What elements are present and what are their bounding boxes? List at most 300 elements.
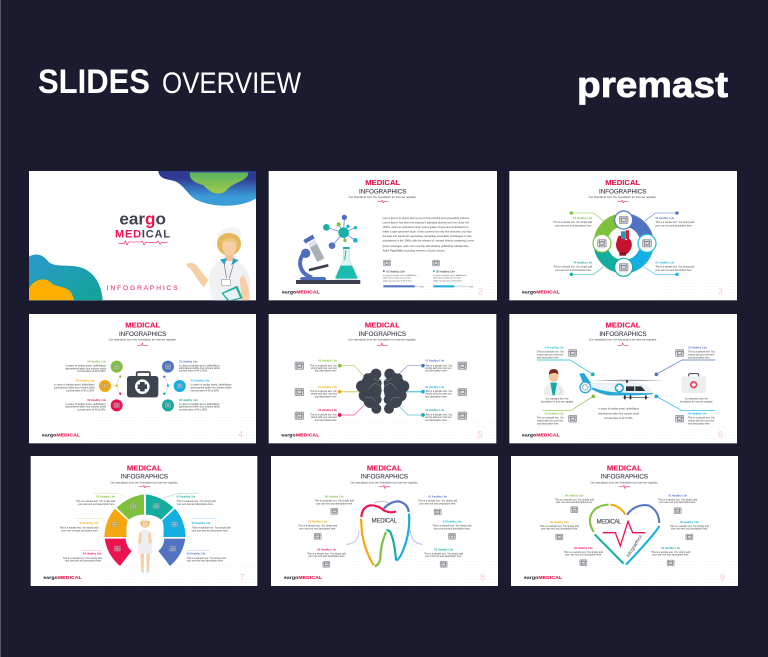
label: 06 healthy life: [310, 408, 338, 422]
heading: MEDICAL: [605, 178, 640, 187]
label: 02 healthy life: survival rates of 40 to 50%.: [191, 389, 220, 392]
label: 04 healthy life: [310, 385, 338, 398]
label: 01 healthy life: [177, 495, 216, 506]
heading: [589, 178, 657, 203]
label: 03 healthy life: administered within four minutes yields: [179, 406, 221, 409]
label: 02 healthy life: your own text and description here.: [434, 527, 471, 530]
stat: 01 healthy life: 90%: [420, 286, 424, 288]
connector dots: [591, 372, 658, 398]
label: 04 healthy life: This is a sample text. You simply add: [553, 266, 593, 269]
label: 06 healthy life: In cases of cardiac arrest, defibrillators: [65, 403, 107, 406]
label: 04 healthy life: [63, 551, 102, 563]
heading: [349, 178, 417, 203]
label: 04 healthy life: [537, 345, 565, 359]
label: 05 healthy life: your own text and description here.: [541, 528, 578, 531]
heading: [110, 463, 179, 488]
label: 01 healthy life: 01 Healthy Life: [177, 495, 196, 499]
label: 04 healthy life: 04 Healthy Life: [318, 385, 338, 389]
illustration: flask: [335, 247, 358, 279]
page number: 4: [238, 430, 243, 440]
label: 02 healthy life: This is a sample text. You simply add: [433, 525, 472, 528]
heading: INFOGRAPHICS: [601, 474, 648, 481]
heading: INFOGRAPHICS: [359, 331, 406, 338]
label: 05 healthy life: This is a sample text. You simply add: [540, 525, 579, 528]
label: 04 healthy life: This is a sample text. You simply add: [307, 552, 347, 555]
label: 02 healthy life: [191, 379, 232, 392]
text block: center: survival rates of 40 to 50%.: [604, 417, 633, 420]
heading: MEDICAL: [365, 321, 400, 330]
text block: paragraph: Lorem Ipsum has been the industry's standard dummy text ever since the: [383, 221, 469, 225]
page number: 3: [718, 287, 723, 297]
label: 01 healthy life: [418, 495, 458, 515]
label: 02 healthy life: 02 Healthy Life: [655, 261, 675, 265]
label: 04 healthy life: and description here.: [315, 395, 337, 398]
accent arcs: [346, 501, 423, 544]
heading: MEDICAL: [367, 463, 402, 472]
label: 03 healthy life: [424, 547, 464, 567]
label: 05 healthy life: 05 Healthy Life: [308, 520, 328, 524]
label: 01 healthy life: survival rates of 40 to 50%.: [179, 370, 208, 373]
label: 03 healthy life: 03 Healthy Life: [545, 412, 564, 416]
label: 01 healthy life: This is a sample text. You: [425, 364, 453, 367]
heading: INFOGRAPHICS: [119, 331, 166, 338]
label: 06 healthy life: [65, 398, 107, 412]
label: 06 healthy life: administered within four minutes yields: [65, 406, 107, 409]
label: 01 healthy life: 01 Healthy Life: [688, 345, 707, 349]
label: 06 healthy life: survival rates of 40 to 50%.: [77, 409, 106, 412]
label: 04 healthy life: simply add your own text: [537, 353, 563, 356]
illustration: heart: [616, 230, 632, 256]
heading: [350, 463, 419, 489]
label: 03 healthy life: [651, 546, 691, 566]
label: 03 healthy life: This is a sample text. You simply add: [424, 552, 464, 555]
connector lines: [537, 360, 715, 411]
stat: 02 healthy life: yields survival rates of 40 to 50%.: [433, 279, 463, 282]
page number: 7: [240, 572, 245, 582]
label: 01 healthy life: This is a sample text. You: [688, 351, 716, 354]
label: 02 healthy life: This is a sample text. You: [425, 390, 453, 393]
label: 03 healthy life: [179, 398, 221, 412]
label: 02 healthy life: your own text and description here.: [671, 528, 708, 531]
heading: Our standards form the foundation for how we regulate.: [590, 481, 659, 485]
illustration: heart outline: [590, 505, 659, 565]
illustration: molecule: [323, 215, 358, 249]
label: 01 healthy life: [425, 359, 453, 373]
page number: 5: [477, 430, 482, 440]
label: 02 healthy life: This is a sample text. You: [688, 417, 716, 420]
label: 02 healthy life: In cases of cardiac arrest, defibrillators: [191, 384, 232, 387]
label: 04 healthy life: [65, 360, 107, 373]
text block: paragraph: 1500s, when an unknown printer took a galley of type and scrambled it to: [383, 225, 469, 229]
heading: [348, 321, 417, 346]
footer logo: eargoMEDICAL: [42, 432, 80, 438]
label: 01 healthy life: simply add your own text: [425, 367, 452, 370]
slide 9: heart: [511, 456, 738, 586]
label: 04 healthy life: simply add your own text: [311, 393, 337, 396]
label: 06 healthy life: 06 Healthy Life: [325, 495, 344, 499]
label: 01 healthy life: In cases of cardiac arrest, defibrillators: [179, 364, 220, 367]
label: 01 healthy life: This is a sample text. You simply add: [177, 500, 216, 503]
page number: 2: [478, 287, 483, 297]
label: 03 healthy life: This is a sample text. You: [425, 413, 453, 416]
label: 05 healthy life: survival rates of 40 to 50%.: [66, 389, 95, 392]
label: 01 healthy life: 01 Healthy Life: [179, 359, 198, 363]
label: 05 healthy life: 05 Healthy Life: [76, 379, 95, 383]
label: 02 healthy life: This is a sample text. You simply add: [670, 525, 709, 528]
text block: paragraph: make a type specimen book. It has survived not only five centuries, but also: [383, 229, 472, 233]
pulse line: [603, 521, 645, 546]
label: 04 healthy life: and description here.: [537, 356, 560, 359]
illustration: nurse: [187, 227, 251, 302]
node icons: [598, 216, 651, 271]
stat: 02 healthy life: 50%: [469, 286, 474, 288]
stat: 01 healthy life: In cases of cardiac arrest, defibrillators: [383, 274, 416, 277]
text block: paragraph: Aldus PageMaker including versions of Lorem Ipsum.: [383, 249, 446, 253]
label: 03 healthy life: survival rates of 40 to 50%.: [179, 409, 208, 412]
label: 01 healthy life: your own text and description here.: [659, 501, 696, 504]
label: 03 healthy life: and description here.: [537, 422, 560, 425]
label: 04 healthy life: 04 Healthy Life: [545, 345, 564, 349]
label: 03 healthy life: 03 Healthy Life: [179, 398, 198, 402]
label: 02 healthy life: [59, 521, 99, 532]
label: 05 healthy life: your own text and description here.: [192, 529, 229, 532]
label: 05 healthy life: This is a sample text. You simply add: [192, 526, 231, 529]
label: 03 healthy life: This is a sample text. You: [537, 417, 565, 420]
illustration: helicopter: [579, 373, 665, 399]
label: 06 healthy life: 06 Healthy Life: [565, 493, 584, 497]
label: 04 healthy life: 04 Healthy Life: [83, 551, 102, 555]
text block: paragraph: [383, 216, 475, 253]
label: 04 healthy life: [307, 547, 347, 567]
label: 01 healthy life: [655, 216, 695, 227]
label: 02 healthy life: [688, 412, 716, 425]
label: 02 healthy life: [655, 261, 695, 272]
label: 04 healthy life: This is a sample text. You simply add: [564, 551, 603, 554]
label: 03 healthy life: This is a sample text. You simply add: [76, 500, 116, 503]
label: 03 healthy life: [425, 408, 453, 422]
label: 01 healthy life: [688, 345, 716, 359]
label: 01 healthy life: simply add your own text: [688, 353, 714, 356]
label: 04 healthy life: your own text and description here.: [308, 555, 345, 558]
label: 06 healthy life: [187, 551, 226, 563]
label: 01 healthy life: [179, 359, 221, 373]
label: 06 healthy life: 06 Healthy Life: [318, 408, 338, 412]
footer logo: eargoMEDICAL: [43, 575, 82, 581]
slide 2: microscope: [269, 171, 497, 300]
slide 5: brain: [269, 314, 496, 443]
page number: 6: [718, 430, 723, 440]
label: 01 healthy life: 01 Healthy Life: [668, 493, 688, 497]
label: 04 healthy life: survival rates of 40 to 50%.: [77, 370, 106, 373]
label: 06 healthy life: This is a sample text. You: [310, 413, 338, 416]
label: 01 healthy life: 01 Healthy Life: [428, 495, 448, 499]
label: 04 healthy life: your own text and description here.: [565, 554, 602, 557]
segment icons: [111, 503, 178, 551]
text block: paragraph: Lorem Ipsum is simply dummy text of the printing and typesetting industry.: [383, 216, 470, 220]
heading: [589, 321, 657, 345]
label: 02 healthy life: simply add your own text: [688, 420, 714, 423]
side icons: [295, 362, 467, 419]
text block: paragraph: popularised in the 1960s with the release of Letraset sheets containing Lorem: [383, 238, 475, 242]
label: 01 healthy life: This is a sample text. You simply add: [658, 498, 698, 501]
illustration: doctor: [544, 369, 564, 395]
label: 06 healthy life: your own text and description here.: [556, 501, 593, 504]
label: 01 healthy life: and description here.: [425, 370, 448, 373]
label: 04 healthy life: administered within four minutes yields: [65, 367, 107, 370]
blob: bottom left: [29, 255, 103, 300]
heading: [109, 321, 177, 346]
heading: MEDICAL: [606, 321, 641, 330]
label: 06 healthy life: 06 Healthy Life: [87, 398, 107, 402]
label: 02 healthy life: administered within four minutes yields: [191, 386, 232, 389]
heading: Our standards form the foundation for how we regulate.: [589, 338, 657, 342]
heading: Our standards form the foundation for how we regulate.: [348, 338, 417, 342]
label: 02 healthy life: [670, 520, 709, 540]
label: 06 healthy life: your own text and description here.: [316, 502, 353, 505]
label: 03 healthy life: 03 Healthy Life: [96, 495, 116, 499]
label: 03 healthy life: In cases of cardiac arrest, defibrillators: [179, 403, 220, 406]
label: 02 healthy life: and description here.: [688, 422, 711, 425]
label: 05 healthy life: 05 Healthy Life: [550, 520, 569, 524]
node circles: [99, 361, 186, 411]
label: 05 healthy life: administered within four minutes yields: [54, 386, 95, 389]
logo: eargo: eargo: [119, 209, 166, 228]
heading: INFOGRAPHICS: [359, 188, 406, 195]
label: 02 healthy life: 02 Healthy Life: [191, 379, 210, 383]
label: 05 healthy life: [192, 521, 231, 532]
label: 02 healthy life: This is a sample text. You simply add: [655, 266, 695, 269]
label: 02 healthy life: simply add your own text: [425, 393, 452, 396]
text block: paragraph: Ipsum passages, and more recently with desktop publishing software like: [383, 244, 469, 248]
label: 02 healthy life: 02 Healthy Life: [80, 521, 99, 525]
heading: INFOGRAPHICS: [121, 474, 168, 481]
heart subtitle: Infographics: [625, 533, 643, 558]
label: 04 healthy life: [553, 261, 593, 272]
page number: 8: [480, 572, 485, 582]
label: 02 healthy life: and description here.: [425, 395, 448, 398]
label icons: [569, 350, 684, 422]
label: 05 healthy life: and description here.: [315, 370, 337, 373]
heading: INFOGRAPHICS: [361, 474, 408, 481]
label: 04 healthy life: 04 Healthy Life: [574, 546, 593, 550]
dotted arcs: [117, 377, 168, 394]
slide 8: tooth: [271, 456, 498, 586]
stat: 01 healthy life: 01 Healthy Life: [386, 269, 405, 273]
ring nodes: [593, 211, 656, 276]
heading: MEDICAL: [607, 463, 642, 472]
label: 02 healthy life: 02 Healthy Life: [443, 520, 462, 524]
stat: 01 healthy life: [383, 260, 424, 288]
illustration: tooth outline: [361, 501, 409, 566]
heart title: MEDICAL: [597, 519, 622, 525]
footer logo: eargoMEDICAL: [282, 289, 320, 295]
title: [38, 63, 302, 101]
stat: 02 healthy life: 02 Healthy Life: [436, 269, 455, 273]
label: 03 healthy life: [553, 216, 593, 227]
label: 05 healthy life: In cases of cardiac arrest, defibrillators: [54, 384, 95, 387]
text block: paragraph: the leap into electronic typesetting, remaining essentially unchanged. It was: [383, 234, 472, 238]
footer logo: eargoMEDICAL: [284, 575, 322, 581]
footer logo: eargoMEDICAL: [524, 575, 562, 581]
brain folds: [365, 378, 400, 401]
illustration: nurse: [138, 518, 152, 573]
label: 04 healthy life: your own text and description here.: [65, 560, 102, 563]
label: 04 healthy life: This is a sample text. You simply add: [63, 557, 102, 560]
label: 01 healthy life: 01 Healthy Life: [655, 216, 675, 220]
node icons: [102, 364, 183, 408]
heading: INFOGRAPHICS: [599, 188, 646, 195]
heading: MEDICAL: [127, 463, 162, 472]
stat: 02 healthy life: In cases of cardiac arrest, defibrillators: [433, 274, 466, 277]
label: 03 healthy life: your own text and description here.: [425, 555, 462, 558]
footer logo: eargoMEDICAL: [522, 289, 560, 295]
label: 02 healthy life: your own text and description here.: [655, 269, 693, 272]
caption: right: [680, 398, 713, 404]
stat: 02 healthy life: [433, 260, 474, 288]
label: 03 healthy life: This is a sample text. You simply add: [651, 551, 691, 554]
caption: left: foundation for how we regulate: [541, 401, 574, 404]
label: 03 healthy life: your own text and description here.: [652, 554, 689, 557]
caption: right: foundation for how we regulate: [680, 401, 713, 404]
ring chart: [600, 220, 647, 267]
label: 05 healthy life: [54, 379, 95, 392]
label: 06 healthy life: This is a sample text. You simply add: [315, 500, 354, 503]
heading: Our standards form the foundation for how we regulate.: [109, 338, 177, 342]
logo: medical: MEDICAL: [115, 228, 170, 240]
page number: 9: [720, 572, 725, 582]
label: 02 healthy life: 02 Healthy Life: [425, 385, 445, 389]
label: 01 healthy life: [658, 493, 698, 514]
caption: right: Our standard form the: [685, 398, 709, 401]
illustration: brain: [356, 369, 409, 414]
stat: 02 healthy life: administered within four minutes: [433, 277, 461, 280]
connector lines: [570, 211, 679, 276]
label: 02 healthy life: [433, 520, 472, 539]
label: 02 healthy life: This is a sample text. You simply add: [59, 526, 99, 529]
footer logo: eargoMEDICAL: [522, 432, 560, 438]
text block: center: [598, 408, 640, 420]
title: SLIDES: [38, 63, 150, 101]
label: 04 healthy life: 04 Healthy Life: [573, 261, 593, 265]
label: 03 healthy life: simply add your own text: [537, 420, 563, 423]
arc segments: [104, 494, 186, 566]
label: 05 healthy life: simply add your own text: [311, 367, 337, 370]
label: 03 healthy life: your own text and description here.: [555, 224, 592, 227]
label: 02 healthy life: [425, 385, 453, 398]
label: 05 healthy life: 05 Healthy Life: [192, 521, 211, 525]
label: 04 healthy life: your own text and description here.: [555, 269, 592, 272]
heading: INFOGRAPHICS: [599, 331, 647, 338]
caption: left: [541, 398, 574, 404]
label: 05 healthy life: your own text and description here.: [299, 527, 336, 530]
label: 05 healthy life: [298, 520, 338, 539]
label: 01 healthy life: and description here.: [688, 356, 711, 359]
label: 01 healthy life: your own text and description here.: [419, 502, 456, 505]
label: 01 healthy life: This is a sample text. You simply add: [418, 500, 458, 503]
heading: Our standards form the foundation for how we regulate.: [349, 195, 417, 199]
label: 03 healthy life: simply add your own text: [425, 416, 452, 419]
label: 03 healthy life: 03 Healthy Life: [425, 408, 445, 412]
heading: [590, 463, 659, 489]
label: 04 healthy life: 04 Healthy Life: [317, 547, 337, 551]
heading: Our standards form the foundation for how we regulate.: [350, 481, 419, 485]
label: 02 healthy life: 02 Healthy Life: [688, 412, 707, 416]
stat: 01 healthy life: yields survival rates of 40 to 50%.: [383, 279, 413, 282]
label: 03 healthy life: 03 Healthy Life: [573, 216, 593, 220]
title: OVERVIEW: [162, 67, 302, 100]
label: 01 healthy life: This is a sample text. You simply add: [655, 221, 695, 224]
blob: top right: [158, 171, 256, 206]
label: 01 healthy life: your own text and description here.: [177, 503, 214, 506]
label: 01 healthy life: 01 Healthy Life: [425, 359, 445, 363]
label: 05 healthy life: This is a sample text. You: [310, 364, 338, 367]
caption: left: Our standard form the: [545, 398, 569, 401]
label: 01 healthy life: your own text and description here.: [655, 224, 693, 227]
label: 02 healthy life: your own text and description here.: [61, 529, 99, 532]
slide 4: medical bag: [29, 314, 256, 443]
label: 05 healthy life: [540, 520, 579, 540]
label: 06 healthy life: simply add your own text: [311, 416, 337, 419]
stat: 01 healthy life: administered within four minutes: [383, 277, 411, 280]
slide 7: nurse arc: [31, 456, 257, 586]
leader lines: [76, 494, 217, 550]
subtitle: INFOGRAPHICS: [107, 285, 178, 292]
text block: center: In cases of cardiac arrest, defibrillators: [598, 408, 640, 411]
slide 3: heart ring: [509, 171, 737, 300]
label: 04 healthy life: This is a sample text. You: [310, 390, 338, 393]
label: 06 healthy life: This is a sample text. You simply add: [555, 498, 594, 501]
illustration: medical bag: [127, 372, 158, 397]
label: 01 healthy life: administered within four minutes yields: [179, 367, 221, 370]
illustration: microscope: [296, 235, 360, 284]
label: 05 healthy life: [310, 359, 338, 373]
brand logo: premast: premast: [577, 64, 728, 105]
label: 06 healthy life: [555, 493, 594, 513]
label: 06 healthy life: This is a sample text. You simply add: [187, 557, 226, 560]
illustration: first aid case: [681, 374, 706, 393]
label: 06 healthy life: [315, 495, 354, 514]
label: 03 healthy life: [537, 412, 565, 425]
label: 03 healthy life: 03 Healthy Life: [661, 546, 681, 550]
label: 06 healthy life: your own text and description here.: [187, 560, 224, 563]
label: 03 healthy life: your own text and description here.: [78, 503, 115, 506]
label: 06 healthy life: and description here.: [315, 419, 337, 422]
label: 06 healthy life: 06 Healthy Life: [187, 551, 206, 555]
label: 03 healthy life: 03 Healthy Life: [434, 547, 454, 551]
connector dots: [338, 364, 425, 417]
heading: Our standards form the foundation for how we regulate.: [589, 195, 657, 199]
heading: MEDICAL: [125, 321, 160, 330]
footer logo: eargoMEDICAL: [281, 432, 319, 438]
label: 05 healthy life: This is a sample text. You simply add: [298, 525, 338, 528]
slide 6: helicopter: [509, 314, 737, 443]
heading: Our standards form the foundation for how we regulate.: [110, 481, 179, 485]
label: 02 healthy life: 02 Healthy Life: [680, 520, 699, 524]
connector lines: [340, 366, 423, 415]
text block: center: administered within four minutes yields: [598, 412, 640, 415]
label: 05 healthy life: 05 Healthy Life: [318, 359, 338, 363]
label: 04 healthy life: 04 Healthy Life: [87, 360, 107, 364]
label: 04 healthy life: [564, 546, 603, 566]
label: 04 healthy life: In cases of cardiac arrest, defibrillators: [65, 365, 107, 368]
tooth label: MEDICAL: [372, 519, 398, 525]
label: 03 healthy life: and description here.: [425, 419, 448, 422]
label: 03 healthy life: [76, 495, 116, 506]
heading: MEDICAL: [365, 178, 400, 187]
label: 04 healthy life: This is a sample text. You: [537, 351, 565, 354]
label: 03 healthy life: This is a sample text. You simply add: [553, 221, 593, 224]
pulse line: [118, 241, 168, 245]
